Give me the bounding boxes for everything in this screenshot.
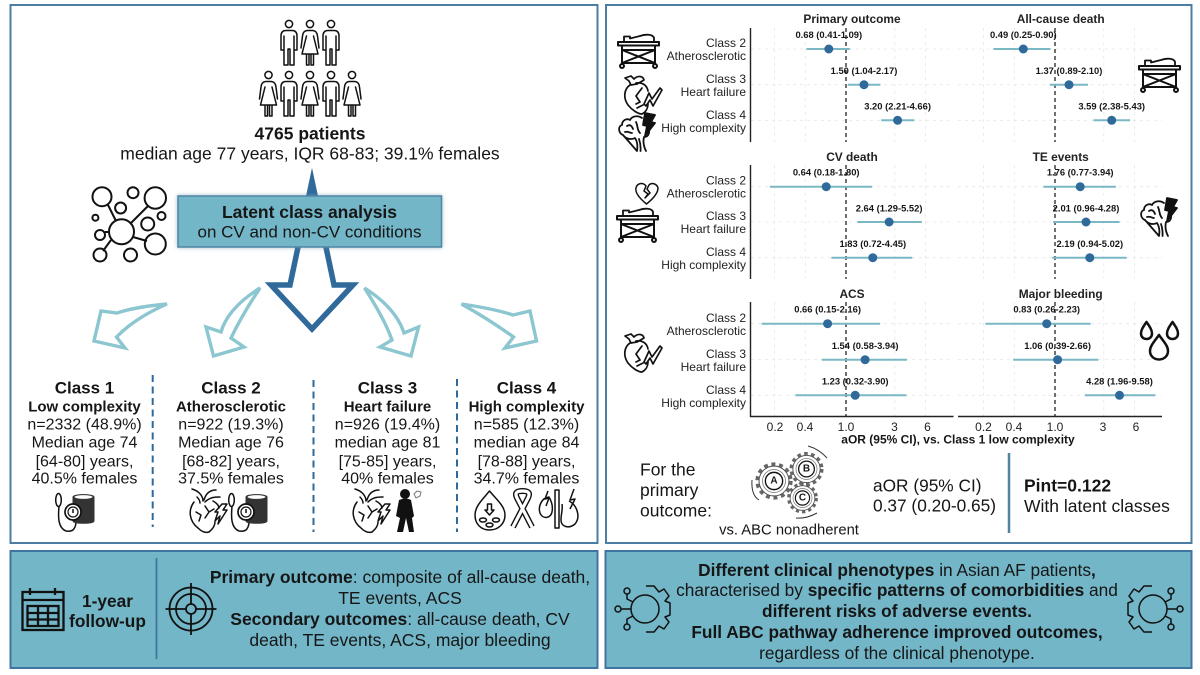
chart: ACS forest plot: 0.66 (0.15-2.16): [794, 304, 861, 314]
icon: diabetes drop, cancer ribbon, kidneys: [475, 489, 578, 530]
chart: TE events forest plot: 1.76 (0.77-3.94): [1047, 166, 1114, 178]
chart: CV death forest plot: High complexity: [661, 258, 746, 272]
text: class 3: median age 81: [335, 434, 441, 452]
text: class 4: Class 4: [497, 378, 557, 398]
chart: ACS forest plot: Class 4: [706, 383, 746, 397]
arrow: to class 3: [364, 288, 418, 356]
chart: ACS forest plot: 1.54 (0.58-3.94): [832, 340, 898, 351]
text: aOR result: aOR (95% CI): [873, 476, 982, 496]
chart: ACS forest plot: Class 2: [706, 311, 746, 325]
chart: ACS forest plot: 1.23 (0.32-3.90): [822, 376, 889, 386]
axis labels: 0.4: [797, 420, 814, 434]
icon: bed, CV death: [617, 209, 658, 242]
text: class 3: Class 3: [358, 378, 417, 398]
panel: follow-up and outcomes: [10, 551, 598, 668]
text: P interaction: Pint=0.122: [1024, 476, 1111, 496]
chart: all-cause death forest plot: 3.59 (2.38-5.43): [1078, 100, 1145, 112]
text: class 1: [27, 378, 142, 488]
text: for the primary outcome: For the: [640, 460, 695, 480]
chart: primary outcome forest plot: 1.50 (1.04-2.17): [831, 65, 897, 76]
text: cohort summary: median age 77 years, IQR 68-83; 39.1% females: [120, 144, 500, 164]
icon: ABC gears: C: [799, 492, 806, 504]
text: class 1: Median age 74: [32, 434, 138, 452]
chart: CV death forest plot: CV death: [826, 150, 878, 164]
text: cohort summary: [120, 124, 500, 164]
chart: major bleeding forest plot: Major bleeding: [1019, 287, 1103, 301]
box: latent class analysis: on CV and non-CV conditions: [198, 222, 421, 242]
arrow: to class 4: [462, 304, 536, 348]
chart: CV death forest plot: Class 2: [706, 174, 746, 188]
icon: group of patients: [260, 20, 361, 116]
text: class 1: Class 1: [55, 378, 114, 398]
icon: tech gear right: [1128, 586, 1183, 632]
icon: brain, primary outcome: [619, 113, 655, 151]
chart: CV death forest plot: Atherosclerotic: [667, 186, 746, 200]
axis labels: 3: [1100, 420, 1107, 434]
axis labels: 1.0: [1047, 420, 1064, 434]
chart: all-cause death forest plot: 1.37 (0.89-2.10): [1036, 65, 1102, 76]
panel: patient cohort and latent classes: [10, 5, 598, 543]
chart: all-cause death forest plot: [990, 12, 1145, 125]
text: class 3: [335, 378, 441, 488]
arrow: to class 2: [206, 288, 260, 356]
icon: network: [92, 187, 166, 262]
text: P interaction: [1024, 476, 1170, 516]
text: class 1: n=2332 (48.9%): [27, 416, 142, 434]
text: conclusions: characterised by specific patterns of comorbidities and: [676, 580, 1118, 600]
text: class 4: High complexity: [469, 398, 585, 416]
chart: CV death forest plot: Class 4: [706, 245, 746, 259]
chart: all-cause death forest plot: All-cause death: [1017, 12, 1105, 26]
text: class 3: 40% females: [341, 470, 434, 488]
chart: major bleeding forest plot: [985, 287, 1155, 400]
chart: primary outcome forest plot: Class 2: [706, 36, 746, 50]
text: for the primary outcome: [640, 460, 712, 520]
axis labels: 0.2: [975, 420, 992, 434]
chart: ACS forest plot: Class 3: [706, 347, 746, 361]
icon: blood pressure cuff: [56, 494, 94, 531]
chart: ACS forest plot: High complexity: [661, 396, 746, 410]
icon: bed, all-cause death: [1139, 59, 1180, 92]
chart: all-cause death forest plot: 0.49 (0.25-0.90): [990, 29, 1057, 40]
chart: primary outcome forest plot: 3.20 (2.21-4.66): [864, 100, 931, 112]
icon: heart and breathless person: [353, 489, 421, 532]
text: aOR result: [873, 476, 996, 516]
text: conclusions: different risks of adverse events.: [762, 601, 1032, 621]
text: class 4: [78-88] years,: [478, 454, 575, 470]
text: class 1: 40.5% females: [32, 470, 137, 488]
chart: primary outcome forest plot: Primary outcome: [803, 12, 901, 26]
text: class 2: [176, 378, 286, 488]
chart: CV death forest plot: Heart failure: [681, 222, 746, 236]
chart: ACS forest plot: Atherosclerotic: [667, 324, 746, 338]
text: P interaction: With latent classes: [1024, 496, 1170, 516]
text: aOR result: 0.37 (0.20-0.65): [873, 496, 996, 516]
chart: primary outcome forest plot: High complexity: [661, 121, 746, 135]
axis labels: 0.4: [1006, 420, 1023, 434]
chart: ACS forest plot: [661, 287, 907, 410]
icon: target: [166, 583, 216, 635]
icon: bed, primary outcome: [618, 35, 659, 68]
icon: tech gear left: [615, 586, 670, 632]
axis labels: 3: [891, 420, 898, 434]
chart: primary outcome forest plot: Class 3: [706, 72, 746, 86]
icon: calendar: [22, 588, 64, 630]
text: class 4: [469, 378, 585, 488]
icon: atherosclerotic heart and cuff: [190, 489, 267, 532]
text: follow-up duration: 1-year: [82, 591, 133, 611]
text: conclusions: Full ABC pathway adherence improved outcomes,: [691, 622, 1103, 642]
text: class 2: [68-82] years,: [182, 454, 280, 470]
text: class 4: n=585 (12.3%): [474, 416, 579, 434]
text: for the primary outcome: primary: [640, 480, 699, 500]
text: class 1: Low complexity: [28, 398, 141, 416]
box: latent class analysis: Latent class analysis: [222, 202, 397, 222]
chart: primary outcome forest plot: 0.68 (0.41-1.09): [795, 29, 862, 40]
text: class 3: n=926 (19.4%): [335, 416, 440, 434]
text: conclusions: regardless of the clinical phenotype.: [759, 643, 1035, 663]
chart: CV death forest plot: [661, 150, 922, 272]
icon: brain, TE events: [1141, 198, 1177, 236]
text: follow-up duration: follow-up: [69, 611, 146, 631]
icon: ABC gears: A: [770, 476, 778, 486]
text: outcomes definition: [210, 567, 590, 650]
text: versus ABC nonadherent: vs. ABC nonadherent: [719, 522, 859, 538]
chart: CV death forest plot: 1.83 (0.72-4.45): [839, 238, 906, 249]
chart: TE events forest plot: TE events: [1033, 150, 1089, 164]
text: outcomes definition: TE events, ACS: [338, 588, 462, 608]
text: class 2: n=922 (19.3%): [178, 416, 284, 434]
icon: ABC gears: B: [803, 464, 810, 474]
chart: ACS forest plot: Heart failure: [681, 360, 746, 374]
chart: CV death forest plot: 2.64 (1.29-5.52): [856, 202, 922, 214]
text: class 4: median age 84: [474, 434, 580, 452]
axis labels: aOR (95% CI), vs. Class 1 low complexity: [841, 432, 1075, 446]
chart: primary outcome forest plot: Heart failure: [681, 85, 746, 99]
text: class 2: Median age 76: [178, 434, 284, 452]
chart: TE events forest plot: 2.01 (0.96-4.28): [1053, 202, 1119, 214]
text: outcomes definition: Secondary outcomes: all-cause death, CV: [230, 609, 570, 629]
text: follow-up duration: [69, 591, 146, 631]
arrow: to class 1: [94, 304, 167, 348]
text: outcomes definition: Primary outcome: composite of all-cause death,: [210, 567, 590, 587]
chart: CV death forest plot: Class 3: [706, 209, 746, 223]
text: cohort summary: 4765 patients: [255, 124, 366, 144]
panel: conclusions: [606, 551, 1192, 668]
icon: heart, ACS: [625, 334, 662, 372]
chart: CV death forest plot: 0.64 (0.18-1.80): [793, 166, 860, 178]
chart: ACS forest plot: ACS: [839, 287, 865, 301]
icon: broken heart: [636, 184, 658, 204]
axis labels: [767, 420, 1140, 446]
icon: ABC gears: [752, 446, 827, 518]
text: class 2: Class 2: [201, 378, 261, 398]
chart: major bleeding forest plot: 4.28 (1.96-9.58): [1086, 376, 1153, 386]
panel: forest plots: [606, 5, 1192, 543]
axis labels: 6: [924, 420, 931, 434]
axis labels: 1.0: [838, 420, 855, 434]
icon: heart, primary outcome: [625, 76, 662, 114]
icon: blood drops: [1141, 322, 1178, 360]
chart: major bleeding forest plot: 0.83 (0.26-2.23): [1013, 304, 1080, 314]
box: latent class analysis: [178, 196, 442, 247]
text: class 4: 34.7% females: [474, 470, 579, 488]
chart: TE events forest plot: [1033, 150, 1127, 262]
axis labels: 6: [1133, 420, 1140, 434]
chart: major bleeding forest plot: 1.06 (0.39-2.66): [1024, 340, 1091, 351]
chart: TE events forest plot: 2.19 (0.94-5.02): [1056, 238, 1123, 249]
text: class 2: Atherosclerotic: [176, 398, 286, 416]
axis labels: 0.2: [767, 420, 784, 434]
chart: primary outcome forest plot: Atherosclerotic: [667, 49, 746, 63]
text: conclusions: Different clinical phenotypes in Asian AF patients,: [698, 560, 1096, 580]
text: conclusions: [676, 560, 1118, 663]
text: outcomes definition: death, TE events, ACS, major bleeding: [249, 630, 551, 650]
text: class 1: [64-80] years,: [36, 454, 133, 470]
chart: primary outcome forest plot: Class 4: [706, 108, 746, 122]
text: class 3: Heart failure: [344, 398, 431, 416]
text: class 2: 37.5% females: [178, 470, 284, 488]
text: class 3: [75-85] years,: [339, 454, 436, 470]
chart: primary outcome forest plot: [661, 12, 931, 135]
arrow: large blue double arrow: [271, 181, 353, 329]
text: for the primary outcome: outcome:: [640, 500, 712, 520]
